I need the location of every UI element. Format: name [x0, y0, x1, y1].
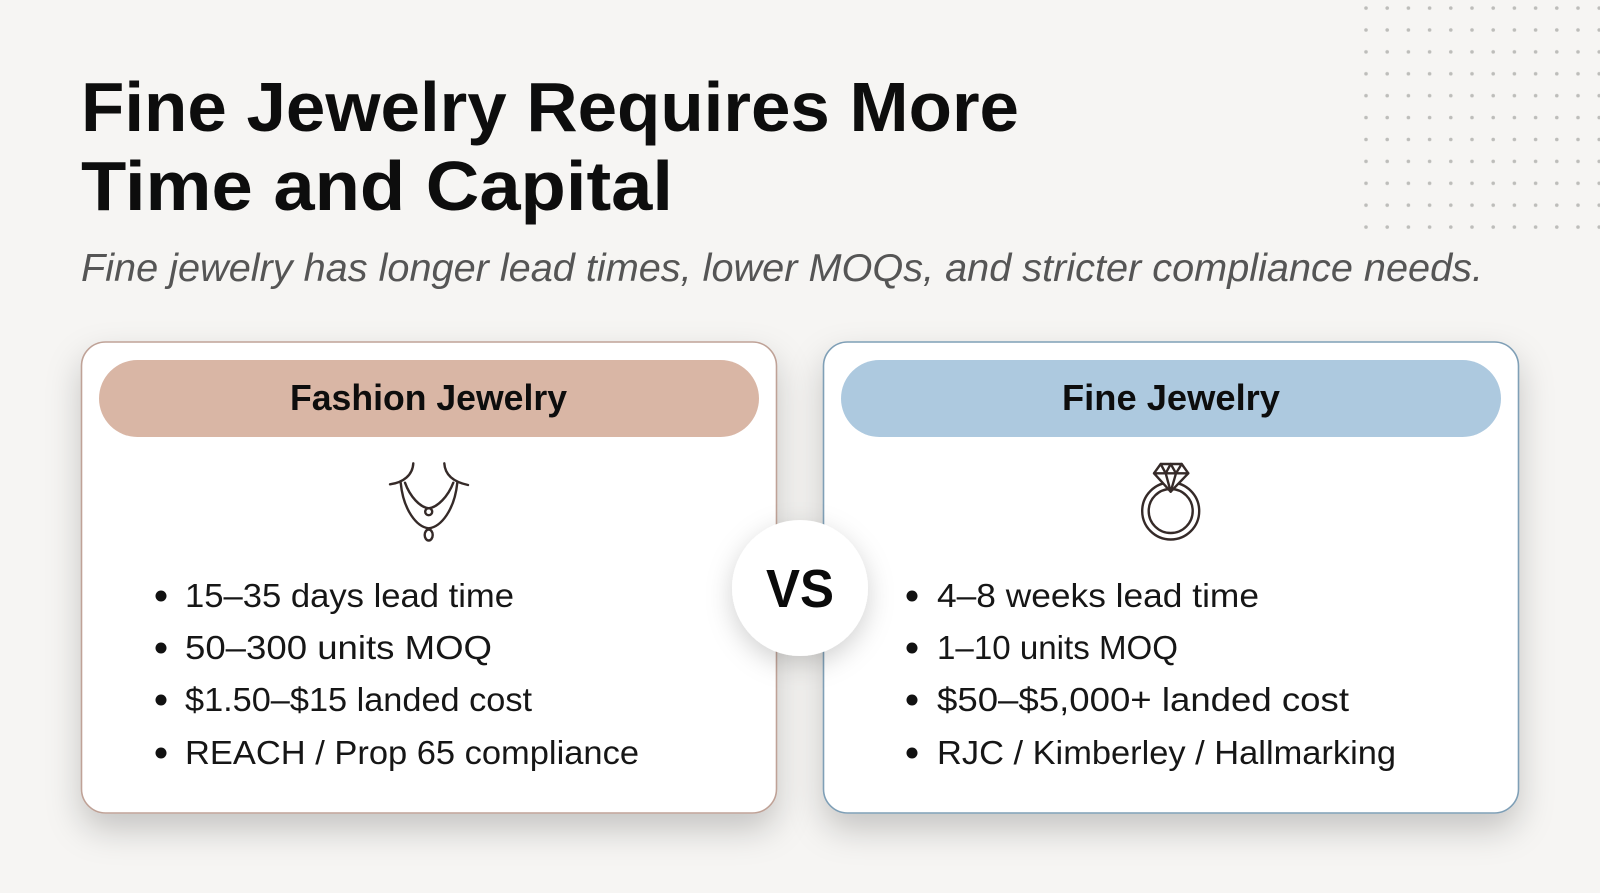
- title: Fine Jewelry Requires More: [81, 68, 1019, 146]
- heading pill: fashion jewelry: [99, 360, 759, 437]
- icon: necklace: [390, 463, 468, 540]
- card background: fine jewelry: [824, 342, 1518, 813]
- heading pill: fine jewelry: Fine Jewelry: [1062, 377, 1280, 418]
- vs badge: [732, 520, 868, 656]
- panel: fashion jewelry: [82, 342, 776, 813]
- title: [81, 68, 1019, 225]
- list: fashion jewelry facts: 15–35 days lead time: [185, 577, 514, 614]
- list: fashion jewelry facts: REACH / Prop 65 compliance: [185, 734, 639, 771]
- list: fashion jewelry facts: $1.50–$15 landed cost: [185, 681, 532, 718]
- heading pill: fine jewelry: [841, 360, 1501, 437]
- card background: fashion jewelry: [82, 342, 776, 813]
- subtitle: Fine jewelry has longer lead times, lower MOQs, and stricter compliance needs.: [81, 247, 1483, 290]
- title: Time and Capital: [81, 147, 673, 225]
- vs badge: VS: [766, 559, 834, 619]
- list: fine jewelry facts: [906, 577, 1396, 771]
- list: fashion jewelry facts: 50–300 units MOQ: [185, 629, 492, 666]
- list: fine jewelry facts: $50–$5,000+ landed cost: [937, 681, 1349, 718]
- list: fashion jewelry facts: [156, 577, 639, 771]
- list: fine jewelry facts: 1–10 units MOQ: [937, 629, 1178, 666]
- list: fine jewelry facts: 4–8 weeks lead time: [937, 577, 1259, 614]
- panel: fine jewelry: [824, 342, 1518, 813]
- heading pill: fashion jewelry: Fashion Jewelry: [290, 377, 567, 418]
- list: fine jewelry facts: RJC / Kimberley / Hallmarking: [937, 734, 1396, 771]
- icon: diamond ring: [1142, 464, 1199, 540]
